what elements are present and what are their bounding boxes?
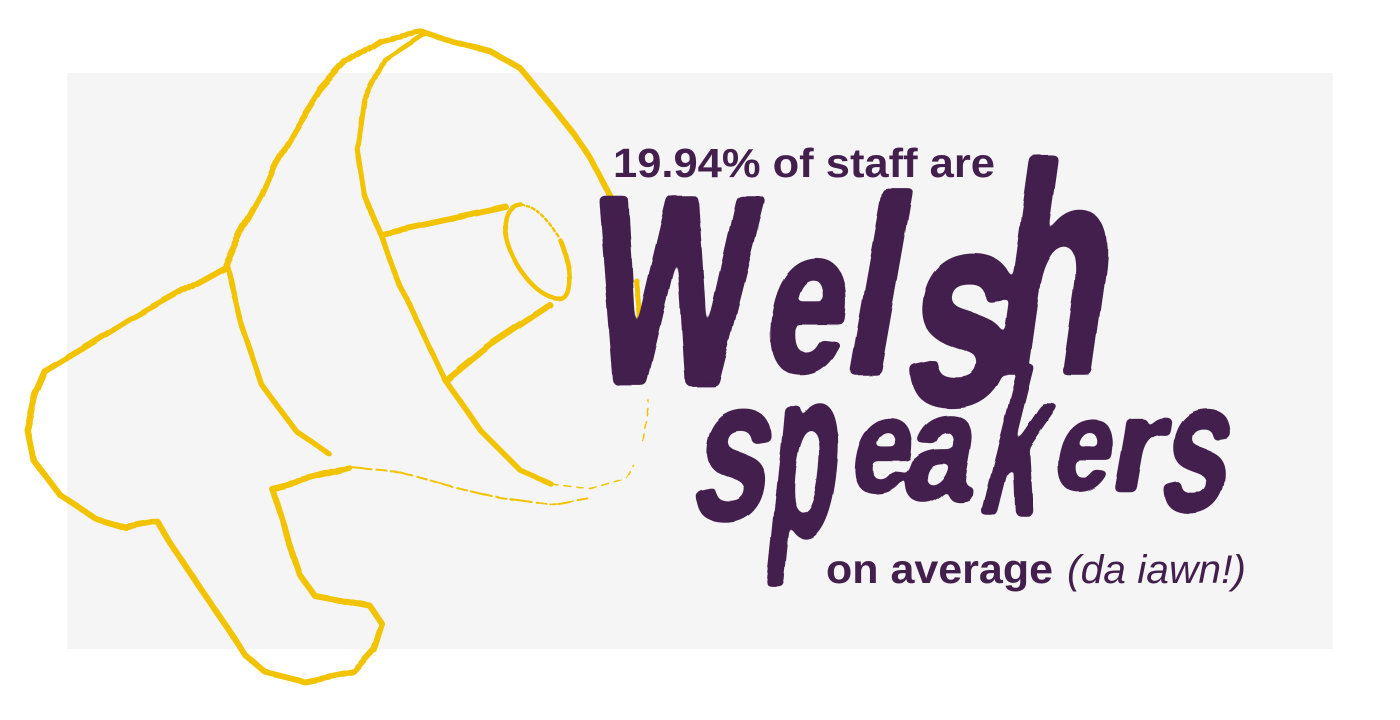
heading: speakers: s	[1149, 343, 1252, 550]
megaphone mouth ellipse	[505, 204, 568, 298]
yellow sliver behind W	[636, 280, 640, 318]
megaphone fading lower edge	[350, 468, 590, 505]
heading: speakers: p	[760, 318, 856, 586]
on average: on average	[826, 546, 1053, 592]
megaphone bell rim	[358, 34, 550, 483]
megaphone neck lower	[447, 305, 550, 380]
da iawn: (da iawn!)	[1067, 548, 1246, 592]
heading: Welsh	[580, 106, 1138, 462]
heading: speakers: k	[964, 330, 1078, 558]
heading: speakers: a	[894, 360, 995, 534]
heading: Welsh: h	[979, 106, 1138, 435]
heading: speakers: e	[841, 370, 929, 521]
text: on average (da iawn!)	[826, 546, 1246, 592]
megaphone fading rim tip	[550, 400, 648, 488]
heading: Welsh: s	[892, 158, 1040, 462]
megaphone neck upper	[380, 206, 505, 233]
text: 19.94% of staff are: 19.94% of staff are	[613, 140, 995, 186]
heading: speakers	[680, 318, 1252, 586]
heading: Welsh: W	[580, 141, 769, 440]
heading: Welsh: l	[829, 147, 933, 426]
heading: speakers: s	[680, 338, 795, 562]
megaphone mouth dotted top	[520, 204, 558, 236]
panel: grey background	[67, 73, 1333, 649]
megaphone outer outline	[27, 31, 610, 682]
megaphone body band	[227, 267, 330, 455]
heading: speakers: r	[1101, 370, 1182, 520]
heading: Welsh: e	[754, 185, 867, 415]
icon: megaphone	[27, 31, 648, 682]
heading: speakers: e	[1045, 373, 1129, 518]
